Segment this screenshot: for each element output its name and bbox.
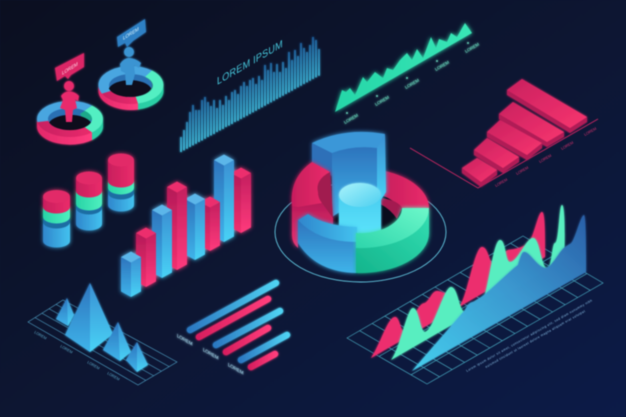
thin orbit ring: [275, 182, 446, 282]
tall blue segment: [312, 132, 386, 217]
donut 2 top segments: [98, 66, 163, 104]
bar 3: [152, 204, 172, 278]
wave grid: [347, 236, 603, 384]
donut 2 walls: [98, 85, 164, 110]
area labels: LOREM: [374, 95, 390, 107]
3D bar chart: [121, 154, 251, 297]
area labels: LOREM: [404, 78, 420, 90]
bar 4: [167, 182, 187, 270]
hole: [318, 192, 402, 240]
horizontal capsule bars: [177, 283, 287, 377]
female figure, pink: [60, 81, 79, 122]
speech bubble pink: LOREM: [62, 61, 78, 77]
pink isometric step bar chart: [410, 79, 598, 188]
bar 1: [121, 252, 141, 297]
axis labels: LOREM: [494, 178, 508, 188]
step bars: [462, 79, 587, 187]
pink wave: [371, 212, 545, 358]
3D ring chart, centre: [275, 132, 446, 282]
left pink segment: [292, 162, 333, 248]
wave area chart: [347, 205, 603, 384]
caption lines: euismod tincidunt ut laoreet dolore magna aliquam erat volutpat: [485, 309, 586, 369]
donut 1 top segments: [37, 101, 103, 137]
pyramid labels: LOREM: [106, 371, 120, 382]
area labels: LOREM: [343, 113, 359, 125]
front blue segment: [298, 214, 357, 273]
blue wave: [412, 215, 586, 371]
capsule labels: LOREM: [203, 347, 218, 362]
front green segment: [356, 208, 429, 273]
green area: [335, 23, 472, 112]
bar 5: [185, 194, 205, 260]
bar 6: [200, 196, 220, 251]
pyramid labels: LOREM: [34, 330, 47, 341]
pyramid grid: [28, 300, 177, 385]
back-right pink segment: [383, 171, 429, 208]
stacked cylinders: [43, 154, 134, 248]
caption lines: Lorem ipsum dolor sit amet, consectetur adipiscing elit, sed diam nonummy nibh: [466, 298, 593, 373]
green area chart: [335, 23, 480, 125]
pyramid labels: LOREM: [60, 344, 73, 355]
wave shadows: [442, 300, 502, 336]
speech bubble blue: LOREM: [123, 26, 139, 42]
area labels: LOREM: [464, 42, 480, 54]
axis labels: LOREM: [516, 166, 529, 176]
capsule labels: LOREM: [177, 333, 192, 348]
axis labels: LOREM: [538, 154, 552, 164]
area labels: [343, 42, 480, 125]
bar 7: [214, 154, 234, 242]
pyramid labels: LOREM: [86, 360, 100, 371]
cylinder 3: [108, 154, 134, 212]
donut chart with male figure: [98, 19, 164, 110]
capsule labels: [177, 333, 243, 377]
capsule labels: LOREM: [228, 362, 243, 377]
cylinder 2: [76, 172, 102, 231]
axis labels: [494, 127, 597, 188]
pyramid chart: [28, 283, 177, 385]
cylinder 1: [43, 190, 70, 248]
area labels: LOREM: [434, 60, 450, 72]
axis labels: LOREM: [584, 127, 597, 137]
spectrum bar chart: [181, 37, 319, 152]
green wave: [391, 205, 565, 360]
heading: lorem ipsum: LOREM IPSUM: [217, 38, 283, 88]
axis labels: LOREM: [560, 141, 574, 151]
axes: [410, 119, 598, 188]
male figure, blue: [120, 47, 141, 85]
bar 2: [136, 228, 156, 287]
capsules: [190, 283, 287, 367]
centre cylinder: [339, 183, 381, 234]
bar 8: [231, 168, 251, 233]
pyramids: [56, 283, 148, 372]
donut 1 walls: [37, 119, 103, 145]
pyramid labels: [34, 330, 120, 382]
donut chart with female figure: [37, 53, 103, 145]
